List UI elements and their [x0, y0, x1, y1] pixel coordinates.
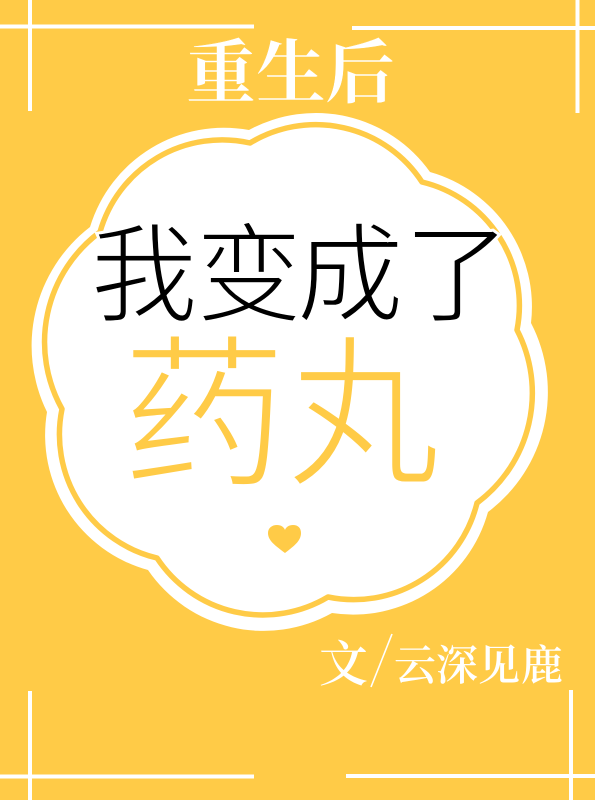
author name: 云深见鹿: 云深见鹿: [394, 644, 563, 690]
white cloud badge: [32, 113, 548, 631]
icon: heart: [268, 525, 301, 553]
author label: 文: 文: [319, 637, 368, 692]
corner lines: bottom left: [0, 691, 254, 800]
corner lines: bottom right: [346, 690, 595, 800]
glyph: 丸: 丸: [286, 324, 440, 508]
glyph: 药: 药: [121, 325, 287, 510]
corner lines: top right: [352, 0, 595, 113]
corner lines: top left: [0, 0, 254, 111]
title line: 我变成了: 我变成了: [90, 215, 511, 336]
title line: 药丸: [121, 324, 440, 510]
slash divider: [371, 634, 392, 687]
cloud outer shape: [32, 113, 548, 631]
heading: 重生后: 重生后: [186, 36, 395, 113]
cloud inner outline: [45, 125, 532, 615]
